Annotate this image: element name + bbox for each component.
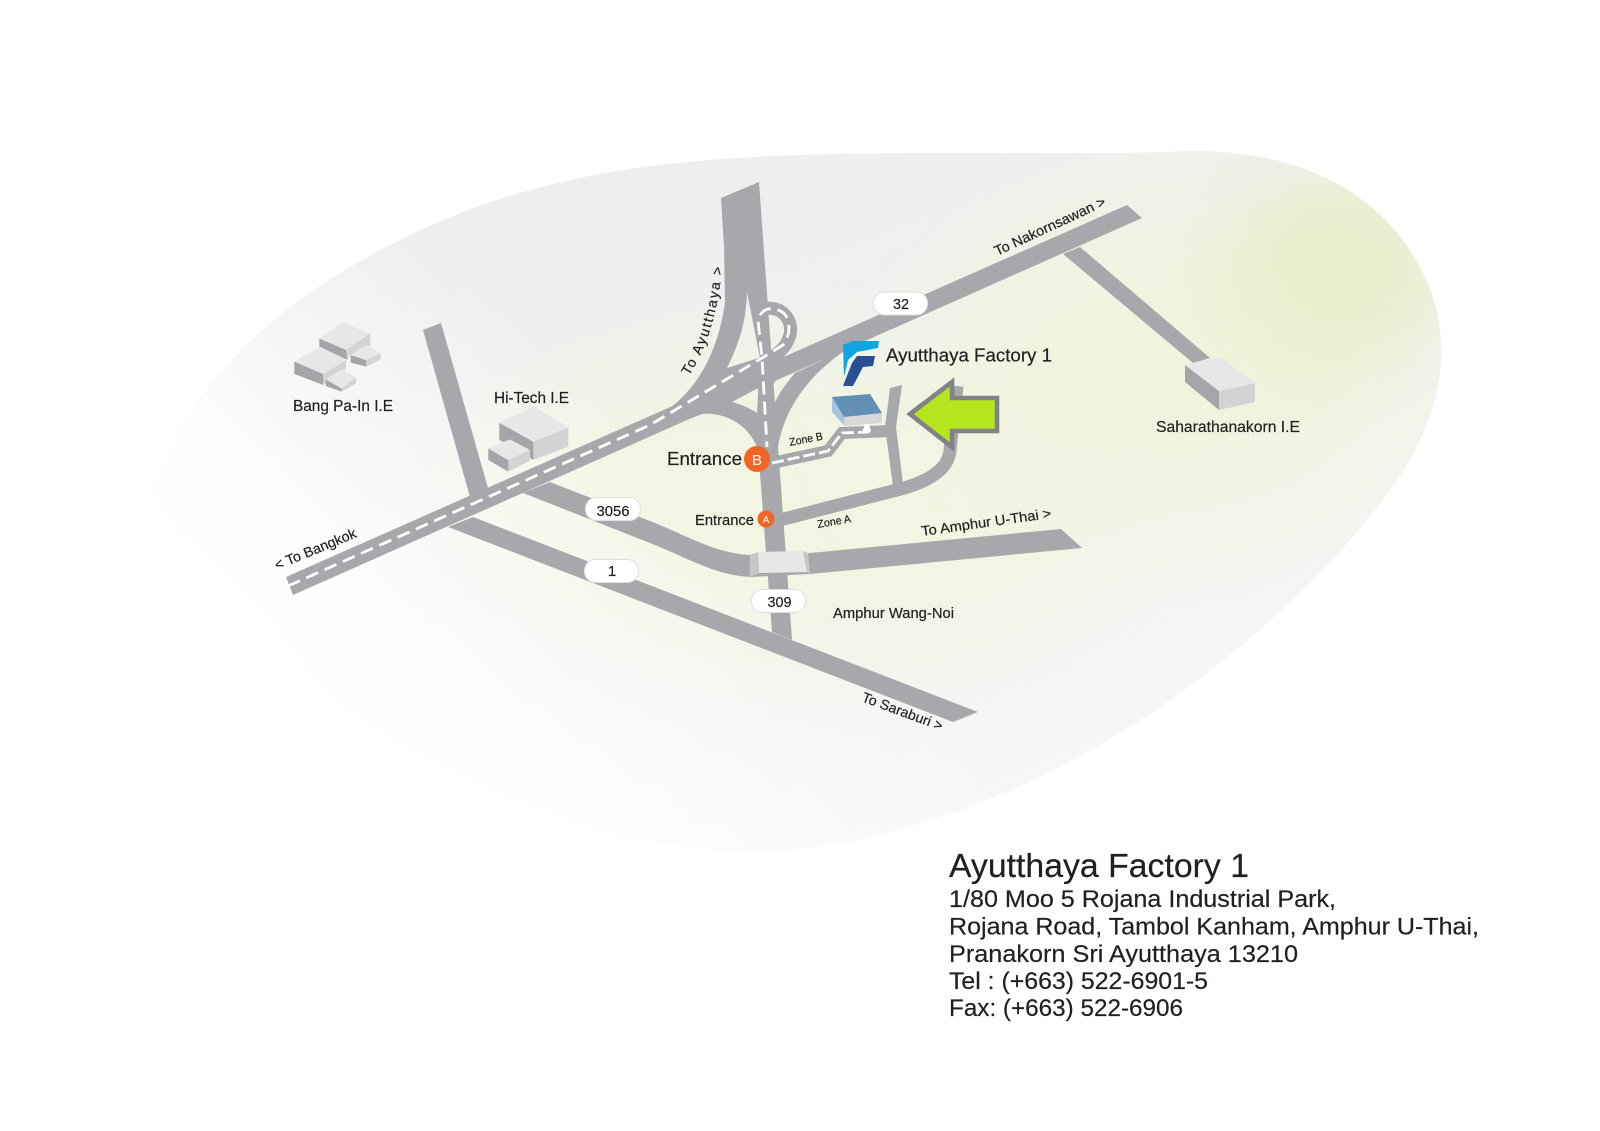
address block (949, 847, 1479, 1022)
road pill: 3056 (586, 498, 640, 520)
entrance A marker: Entrance (695, 513, 754, 529)
address line 3: Pranakorn Sri Ayutthaya 13210 (949, 941, 1298, 968)
icon: Hi-Tech buildings (488, 407, 568, 472)
entrance B marker: Entrance (667, 449, 742, 469)
road: zone B access (885, 385, 903, 486)
road: north-west branch (423, 323, 488, 497)
icon: Bang Pa-In buildings (294, 323, 381, 392)
entrance B marker (667, 446, 770, 472)
route end arrow (862, 418, 871, 433)
entrance A marker: A (763, 515, 770, 526)
arrow: location pointer (910, 382, 997, 447)
telephone: Tel : (+663) 522-6901-5 (949, 968, 1208, 995)
address line 1: 1/80 Moo 5 Rojana Industrial Park, (949, 886, 1336, 913)
road: east ramp (772, 347, 850, 447)
dashed route: highway through loop to entrance B (288, 309, 789, 586)
road: lower ramp (693, 400, 762, 447)
road: route 1 to Saraburi (448, 517, 978, 722)
road pill: 1 (584, 560, 638, 582)
label: Zone B: Zone B (788, 431, 824, 449)
fax: Fax: (+663) 522-6906 (949, 995, 1183, 1022)
road: main highway (286, 205, 1142, 595)
road pill: 32: 32 (893, 296, 909, 313)
entrance B marker: B (752, 452, 762, 469)
road: north-south route 309 with Ayutthaya branch (670, 182, 792, 640)
label: To Nakornsawan: To Nakornsawan > (992, 193, 1108, 259)
road: clover loop (762, 308, 791, 362)
road network (286, 182, 1210, 722)
label: To Saraburi: To Saraburi > (860, 689, 945, 734)
background blob with soft gradient (247, 151, 1442, 802)
address line 2: Rojana Road, Tambol Kanham, Amphur U-Thai, (949, 914, 1479, 940)
icon: Saharathanakorn building (1185, 357, 1255, 410)
road: upper band to loop (670, 357, 775, 424)
label: Ayutthaya Factory 1 on map: Ayutthaya Factory 1 (886, 346, 1052, 366)
road: zone A (780, 386, 957, 520)
label: Bang Pa-In I.E: Bang Pa-In I.E (293, 398, 393, 415)
label: Saharathanakorn I.E: Saharathanakorn I.E (1156, 419, 1300, 436)
icon: factory building (832, 394, 882, 426)
road pill: 3056: 3056 (596, 503, 630, 520)
label: Amphur Wang-Noi: Amphur Wang-Noi (833, 606, 954, 622)
icon: factory logo (843, 341, 879, 386)
road: route 3056 and To Amphur U-Thai (523, 482, 1082, 577)
label: To Amphur U-Thai: To Amphur U-Thai > (920, 505, 1052, 539)
road pill: 309: 309 (768, 594, 792, 611)
road: Saharathanakorn spur (1063, 247, 1210, 363)
label: To Bangkok: < To Bangkok (272, 524, 360, 573)
label: Zone A: Zone A (816, 513, 853, 531)
road pill: 32 (874, 292, 928, 315)
label: Hi-Tech I.E: Hi-Tech I.E (494, 390, 569, 407)
entrance A marker (695, 510, 774, 529)
bridge over route 309 (750, 551, 810, 577)
dashed route: entrance B to factory (772, 432, 869, 463)
road pill: 309 (752, 590, 806, 612)
label: To Ayutthaya: To Ayutthaya > (680, 267, 721, 374)
road: entrance B to factory (772, 431, 890, 463)
road pill: 1: 1 (608, 563, 616, 580)
address heading: Ayutthaya Factory 1 (949, 847, 1249, 884)
